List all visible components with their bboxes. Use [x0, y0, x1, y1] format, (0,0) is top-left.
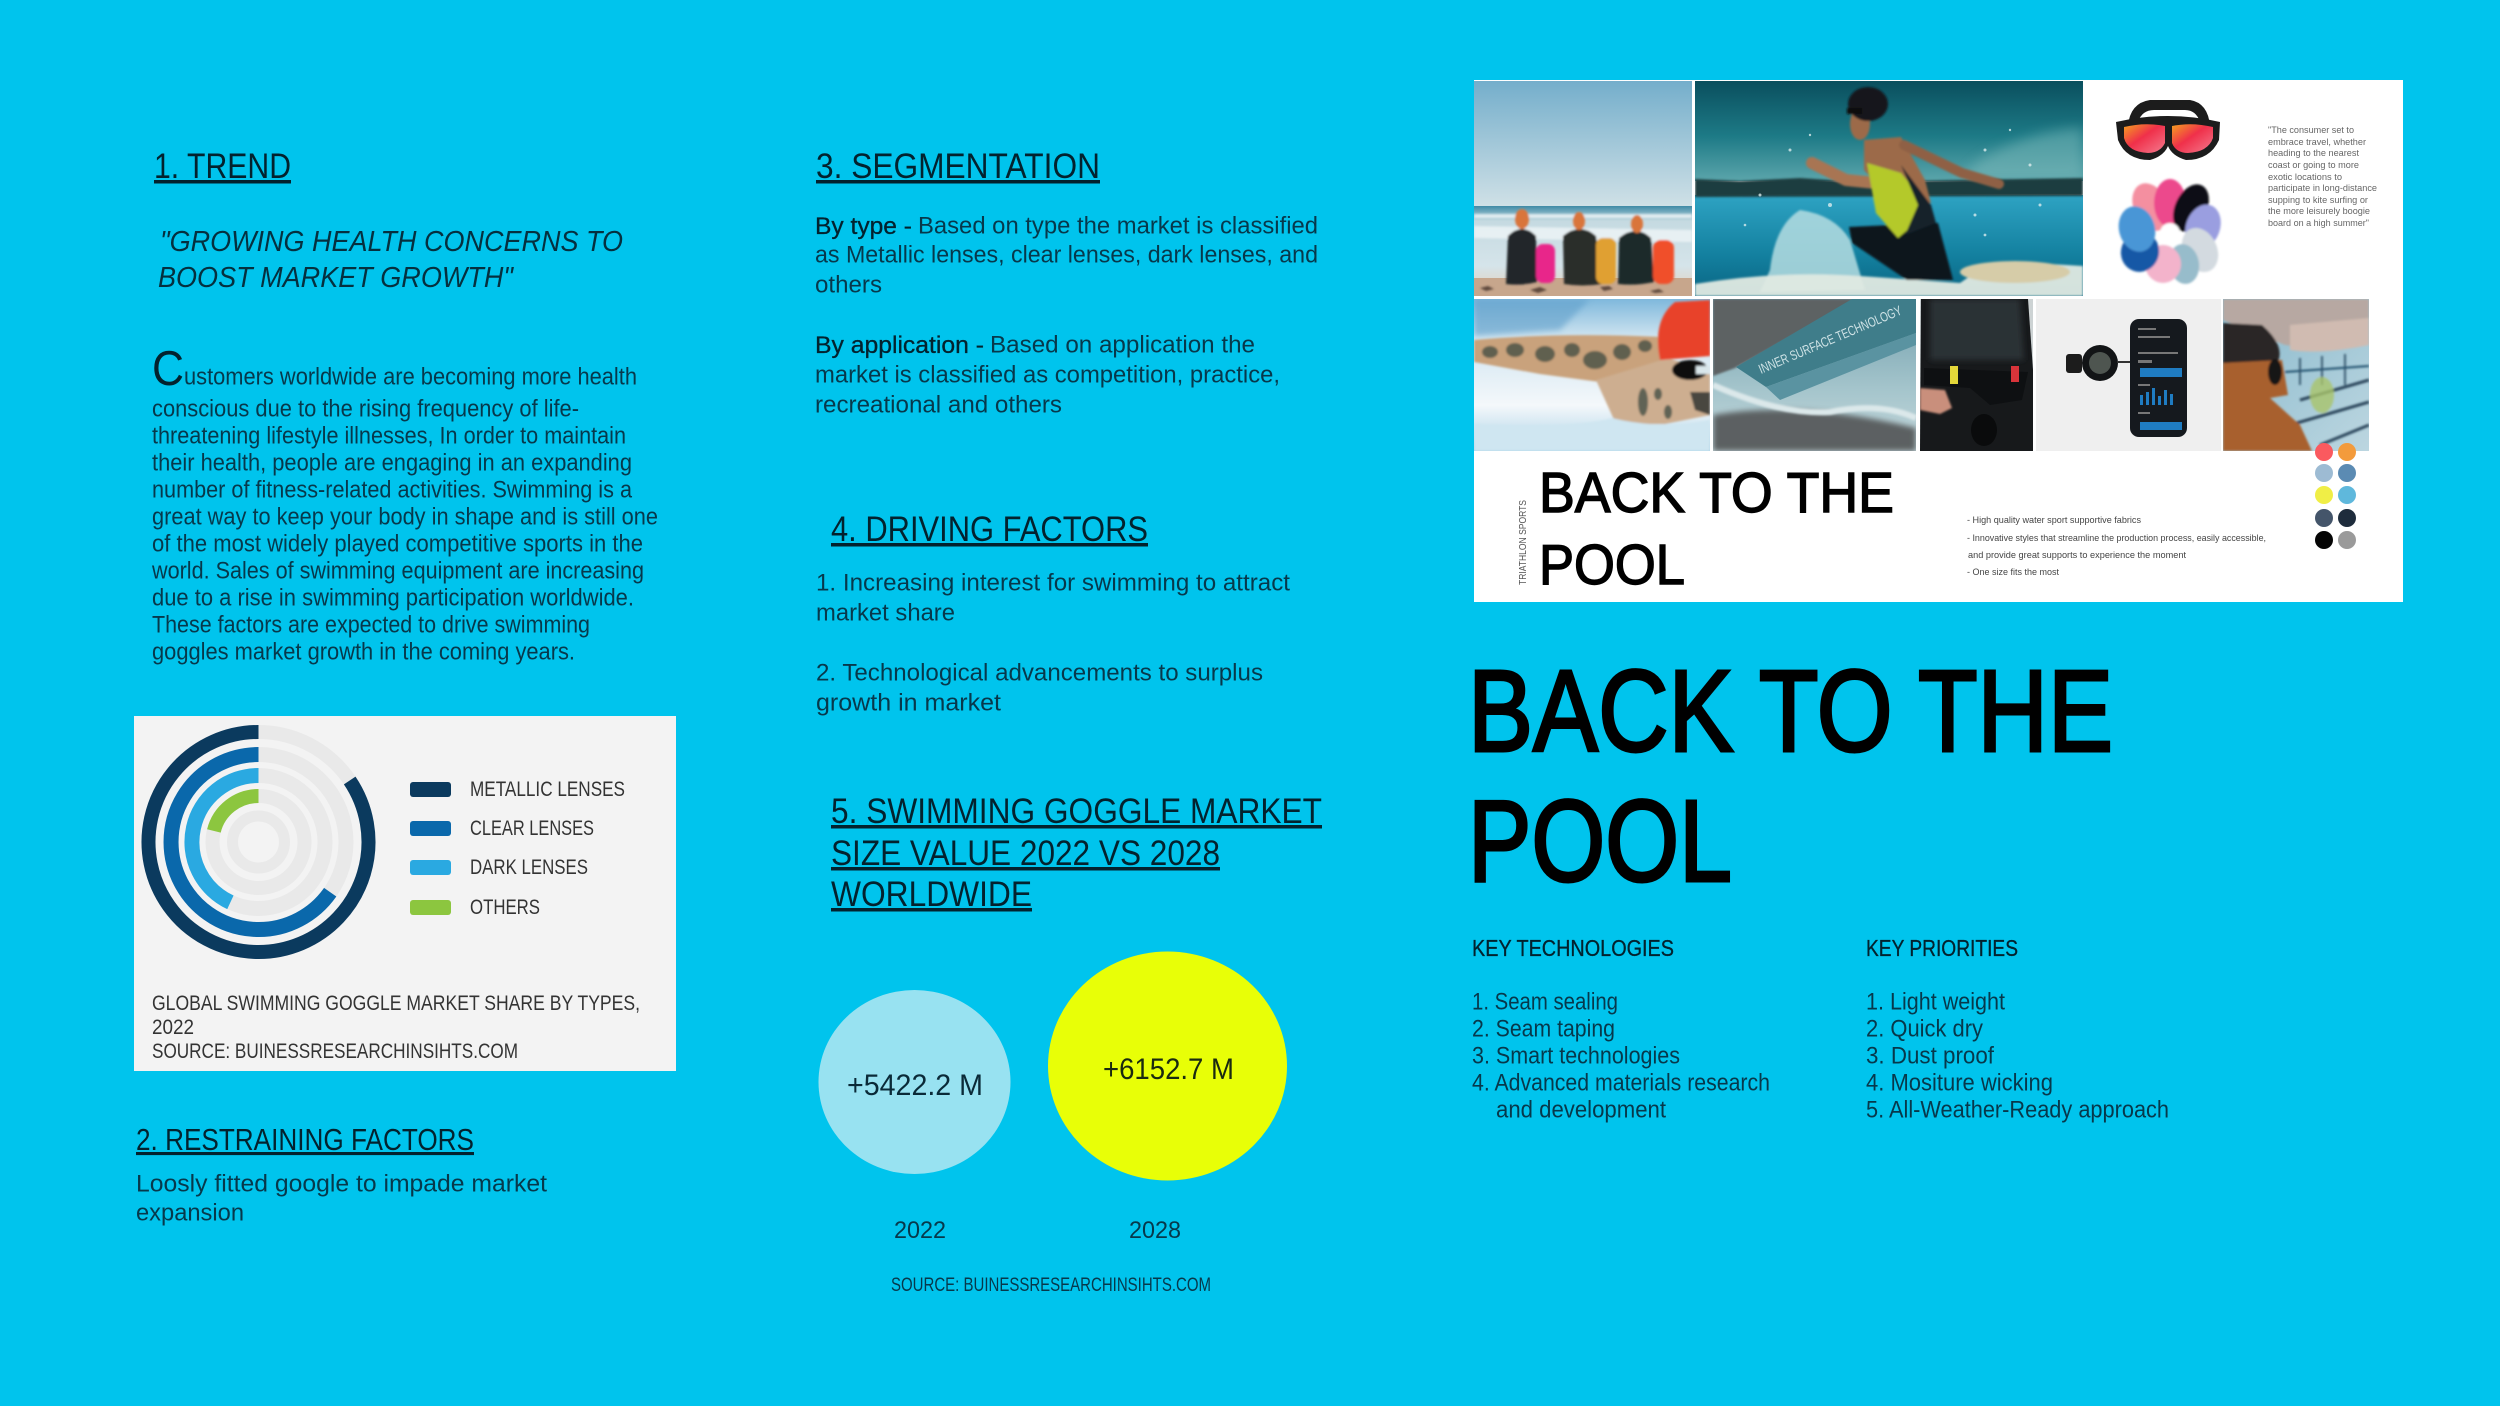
section 5: market size [818, 792, 1322, 1296]
quote text: supping to kite surfing or [2268, 195, 2368, 206]
heading: key technologies: KEY TECHNOLOGIES [1472, 935, 1674, 961]
quote text: the more leisurely boogie [2268, 206, 2370, 217]
restraining factors text [136, 1170, 547, 1226]
moodboard title: POOL [1539, 533, 1685, 597]
by type text: By type - [815, 213, 912, 240]
legend: CLEAR LENSES [470, 817, 594, 840]
by application text: Based on application the [990, 332, 1255, 358]
photo: underwater swimmer [2223, 299, 2369, 451]
quote text: board on a high summer" [2268, 218, 2369, 229]
by application text: By application - [815, 332, 984, 359]
subheading: quote: "GROWING HEALTH CONCERNS TO [160, 226, 623, 258]
moodboard title: BACK TO THE [1539, 461, 1894, 525]
heading: driving factors: 4. DRIVING FACTORS [831, 510, 1148, 549]
body paragraph: of the most widely played competitive sports in the [152, 530, 643, 558]
body paragraph: number of fitness-related activities. Swimming is a [152, 476, 633, 504]
quote text: embrace travel, whether [2268, 137, 2366, 148]
body paragraph: great way to keep your body in shape and is still one [152, 504, 658, 530]
heading: market size: SIZE VALUE 2022 VS 2028 [831, 834, 1220, 873]
photo: inner surface technology fabric [1713, 299, 1916, 451]
body paragraph: These factors are expected to drive swimming [152, 612, 590, 638]
quote text [2268, 125, 2377, 229]
restraining factors text: expansion [136, 1200, 244, 1226]
photo: smart goggle and phone [2036, 299, 2221, 451]
technologies list: and development [1496, 1096, 1666, 1124]
body paragraph [151, 342, 658, 666]
priorities list [1866, 988, 2169, 1124]
bubble: 2028: 2028 [1129, 1217, 1181, 1244]
icon: swim mask [2116, 100, 2220, 160]
by application text: recreational and others [815, 392, 1062, 418]
icon: swim caps [2114, 177, 2227, 286]
main title: BACK TO THE [1468, 646, 2113, 776]
driving factors list: 2. Technological advancements to surplus [816, 660, 1263, 686]
moodboard bullets [1967, 515, 2266, 578]
heading: restraining factors: 2. RESTRAINING FACTORS [136, 1122, 474, 1157]
driving factors list: 1. Increasing interest for swimming to attract [816, 570, 1290, 596]
body paragraph: due to a rise in swimming participation worldwide. [152, 584, 634, 612]
subheading: quote: BOOST MARKET GROWTH" [158, 262, 515, 294]
technologies list [1472, 988, 1770, 1124]
technologies list: 3. Smart technologies [1472, 1042, 1680, 1070]
body paragraph: world. Sales of swimming equipment are increasing [151, 558, 644, 584]
heading: 1. TREND: 1. TREND [154, 147, 291, 186]
heading: market size: 5. SWIMMING GOGGLE MARKET [831, 792, 1322, 831]
quote text: coast or going to more [2268, 160, 2359, 171]
body paragraph: their health, people are engaging in an expanding [152, 450, 632, 476]
body paragraph: threatening lifestyle illnesses, In order to maintain [152, 422, 626, 450]
priorities list: 3. Dust proof [1866, 1042, 1994, 1070]
chart caption: 2022 [152, 1016, 194, 1039]
body paragraph: C [152, 342, 184, 396]
technologies list: 4. Advanced materials research [1472, 1070, 1770, 1096]
by type text: as Metallic lenses, clear lenses, dark lenses, and [815, 242, 1318, 268]
quote text: "The consumer set to [2268, 125, 2354, 136]
by type text [815, 212, 1318, 298]
photo: wetsuit with sensor [1920, 299, 2033, 451]
heading: segmentation: 3. SEGMENTATION [816, 147, 1100, 186]
heading: market size: WORLDWIDE [831, 875, 1032, 914]
chart caption [152, 992, 640, 1063]
by type text: Based on type the market is classified [918, 212, 1318, 240]
main title [1468, 646, 2113, 906]
quote text: exotic locations to [2268, 172, 2342, 183]
photo: swimmers on beach [1474, 81, 1692, 296]
bubble: 2022: 2022 [894, 1217, 946, 1244]
technologies list: 1. Seam sealing [1472, 988, 1618, 1016]
photo: swimmer with red cap [1474, 299, 1710, 451]
section 1: trend [151, 147, 658, 666]
by type text: others [815, 272, 882, 298]
moodboard title [1539, 461, 1894, 597]
body paragraph: goggles market growth in the coming years. [152, 638, 575, 666]
moodboard bullets: - One size fits the most [1967, 567, 2059, 578]
restraining factors text: Loosly fitted google to impade market [136, 1170, 547, 1198]
chart caption: SOURCE: BUINESSRESEARCHINSIHTS.COM [152, 1040, 518, 1063]
bubble: 2022 [818, 990, 1010, 1244]
source note: SOURCE: BUINESSRESEARCHINSIHTS.COM [891, 1275, 1211, 1296]
chart caption: GLOBAL SWIMMING GOGGLE MARKET SHARE BY TYPES, [152, 992, 640, 1015]
legend: DARK LENSES [470, 856, 588, 879]
section 3: segmentation [815, 147, 1318, 418]
panel: market share chart [134, 716, 676, 1071]
moodboard bullets: - Innovative styles that streamline the production process, easily accessible, [1967, 533, 2266, 544]
priorities list: 1. Light weight [1866, 988, 2005, 1016]
quote text: heading to the nearest [2268, 148, 2359, 159]
driving factors list [816, 570, 1290, 716]
radial bar chart [148, 732, 368, 952]
body paragraph: conscious due to the rising frequency of life- [152, 396, 579, 422]
bubble: 2028: +6152.7 M [1103, 1053, 1234, 1086]
legend: OTHERS [470, 896, 540, 919]
key priorities [1866, 935, 2169, 1124]
moodboard bullets: - High quality water sport supportive fabrics [1967, 515, 2141, 526]
priorities list: 4. Mositure wicking [1866, 1070, 2053, 1096]
by application text [815, 332, 1280, 418]
vertical label: TRIATHLON SPORTS [1518, 500, 1529, 585]
heading: market size [831, 792, 1322, 914]
by application text: market is classified as competition, practice, [815, 362, 1280, 388]
legend [410, 778, 625, 919]
heading: key priorities: KEY PRIORITIES [1866, 935, 2018, 961]
photo: triathlete running through water [1695, 81, 2083, 296]
panel: moodboard [1474, 80, 2403, 602]
key technologies [1472, 935, 1770, 1124]
quote text: participate in long-distance [2268, 183, 2377, 194]
driving factors list: growth in market [816, 690, 1001, 716]
priorities list: 5. All-Weather-Ready approach [1866, 1096, 2169, 1124]
body paragraph: ustomers worldwide are becoming more health [184, 364, 637, 390]
section 2: restraining factors [136, 1122, 547, 1226]
driving factors list: market share [816, 600, 955, 626]
section 4: driving factors [816, 510, 1290, 716]
bubble: 2022: +5422.2 M [847, 1069, 983, 1102]
priorities list: 2. Quick dry [1866, 1016, 1983, 1042]
subheading: quote [158, 226, 623, 294]
moodboard bullets: and provide great supports to experience the moment [1968, 550, 2186, 561]
colour palette [2315, 443, 2356, 549]
main title: POOL [1468, 776, 1732, 906]
technologies list: 2. Seam taping [1472, 1016, 1615, 1042]
bubble: 2028 [1048, 952, 1287, 1244]
legend: METALLIC LENSES [470, 778, 625, 801]
